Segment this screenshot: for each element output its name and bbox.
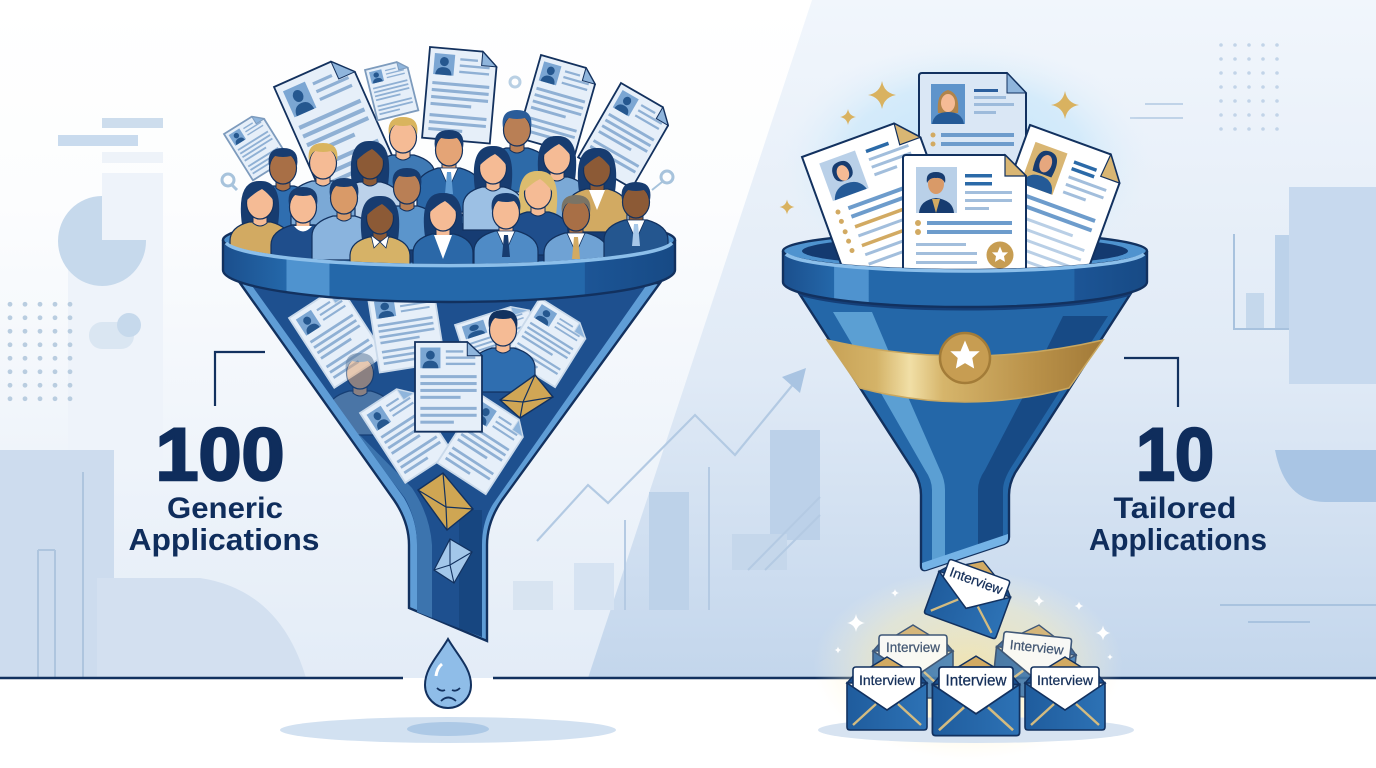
stat: 10 tailored applications: 10 bbox=[1136, 413, 1214, 496]
right bracket bbox=[1124, 358, 1178, 407]
floating resumes above left funnel bbox=[224, 47, 675, 200]
interview envelopes bbox=[847, 548, 1105, 736]
rim back bbox=[783, 232, 1147, 270]
envelope front center bbox=[932, 656, 1020, 736]
blue glow behind tailored resumes bbox=[775, 40, 1155, 290]
envelope back right: Interview bbox=[1009, 637, 1065, 658]
funnel cone bbox=[797, 290, 1133, 570]
left background decoration bbox=[0, 118, 306, 678]
sad water drop bbox=[425, 639, 471, 708]
gold band bbox=[827, 340, 1103, 402]
ground line bbox=[0, 677, 1376, 679]
stat: 10 tailored applications bbox=[1089, 413, 1267, 557]
decorative search icons bbox=[222, 77, 673, 190]
stat: 100 generic applications bbox=[128, 413, 320, 557]
resume right bbox=[979, 125, 1128, 302]
resume left bbox=[802, 117, 961, 289]
rim band bbox=[783, 251, 1147, 307]
envelope front left: Interview bbox=[859, 672, 916, 688]
stat: 100 generic applications: Applications bbox=[128, 522, 320, 557]
stat: 10 tailored applications: Tailored bbox=[1114, 492, 1236, 525]
envelope top bbox=[924, 548, 1019, 639]
cone highlights bbox=[800, 292, 1130, 570]
falling resumes bbox=[289, 285, 591, 494]
right funnel bbox=[783, 73, 1147, 570]
gold envelope bbox=[500, 375, 553, 418]
gold sparkles bbox=[780, 81, 1079, 214]
envelope front right bbox=[1025, 657, 1105, 730]
white sparkles bbox=[834, 589, 1113, 660]
envelope back right bbox=[992, 621, 1079, 702]
envelope front left bbox=[847, 657, 927, 730]
blue envelope bbox=[434, 539, 472, 583]
envelope back left bbox=[873, 625, 953, 698]
envelope top: Interview bbox=[948, 564, 1005, 597]
rim band bbox=[223, 240, 675, 302]
envelope back left: Interview bbox=[886, 640, 940, 655]
crowd of applicants bbox=[230, 110, 668, 280]
funnel interior bbox=[253, 287, 645, 637]
right background decoration bbox=[1130, 38, 1376, 622]
funnel cone bbox=[240, 283, 660, 641]
gold envelope lower bbox=[418, 473, 473, 530]
shadow under envelopes bbox=[818, 717, 1134, 743]
rim back bbox=[223, 215, 675, 265]
stat: 100 generic applications: Generic bbox=[167, 492, 283, 525]
envelope front right: Interview bbox=[1037, 672, 1094, 688]
star medallion bbox=[940, 333, 990, 383]
envelope front center: Interview bbox=[945, 673, 1007, 690]
stat: 100 generic applications: 100 bbox=[156, 413, 284, 496]
stat: 10 tailored applications: Applications bbox=[1089, 522, 1267, 557]
resume front bbox=[903, 155, 1026, 275]
left funnel bbox=[223, 110, 675, 650]
tailored resumes bbox=[802, 73, 1128, 302]
shadow under drop bbox=[280, 717, 616, 743]
yellow glow behind interview envelopes bbox=[813, 570, 1123, 760]
resume back bbox=[919, 73, 1026, 193]
left bracket bbox=[215, 352, 265, 406]
center growth chart bbox=[513, 368, 820, 610]
